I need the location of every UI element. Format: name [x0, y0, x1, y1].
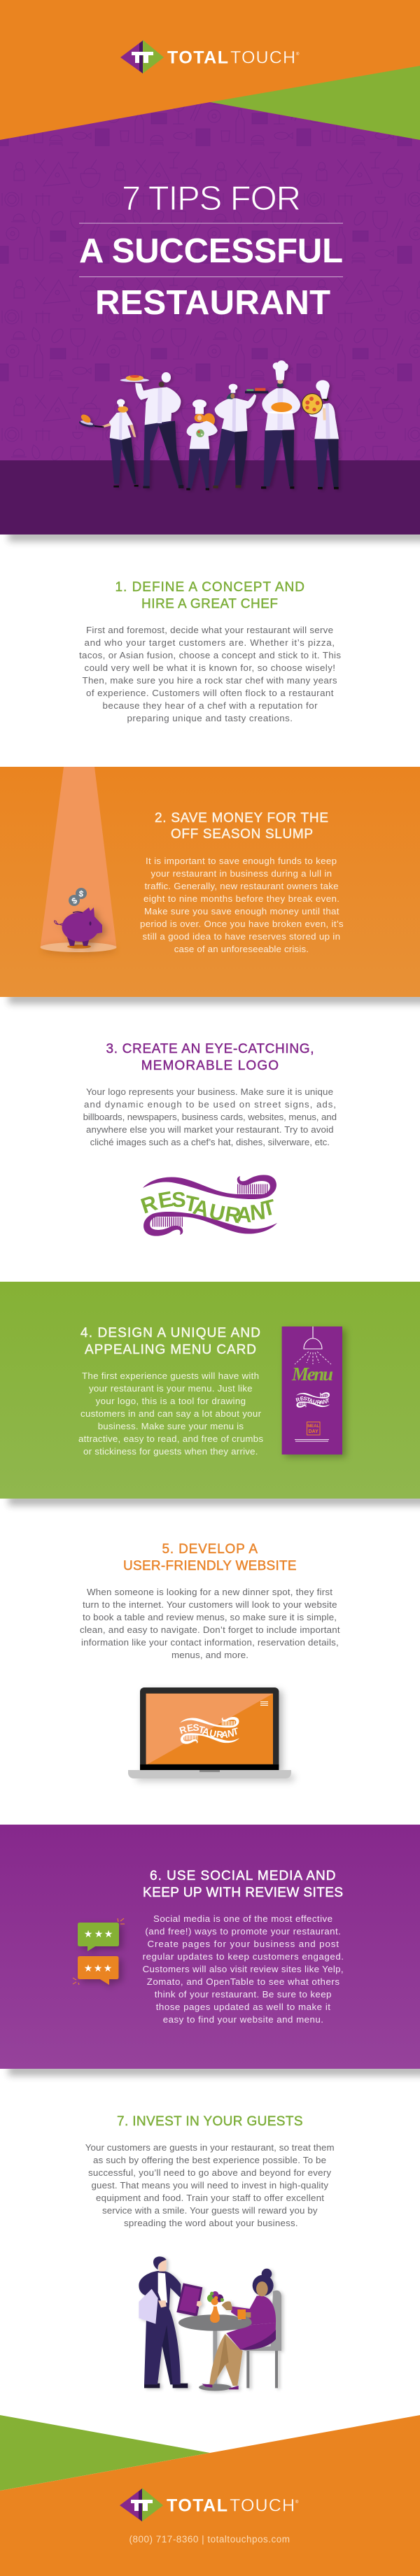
tip 4 body text: The first experience guests will have with [82, 1371, 259, 1381]
tip 6 body text: Zomato, and OpenTable to see what others [147, 1976, 340, 1987]
tip 5 body text: turn to the internet. Your customers will look to your website [83, 1599, 337, 1610]
tip 3 body text [83, 1087, 337, 1147]
tip 6 body text: those pages updated as well to make it [156, 2002, 330, 2012]
tip 1 body text: First and foremost, decide what your restaurant will serve [86, 625, 333, 635]
tip 6 body text: (and free!) ways to promote your restaurant. [145, 1926, 341, 1937]
tip 2 body text: It is important to save enough funds to keep [146, 856, 337, 866]
tip 5 heading [123, 1542, 297, 1573]
tip 1 heading: HIRE A GREAT CHEF [141, 597, 278, 611]
tip 2 body text: period is over. Once you have broken even, it’s [140, 919, 344, 929]
laptop screen logo [178, 1717, 240, 1744]
tip 3 body text: and dynamic enough to be used on street signs, ads, [84, 1099, 336, 1110]
menu card illustration: Menu [291, 1364, 333, 1385]
tip 7 body text [85, 2142, 335, 2228]
tip 5 body text: When someone is looking for a new dinner spot, they first [87, 1587, 332, 1597]
tip 2 heading: OFF SEASON SLUMP [171, 827, 313, 842]
tip 3 heading [106, 1042, 314, 1073]
panel: tip 2 [0, 767, 420, 997]
chef with pan [78, 399, 139, 488]
tip 6 body text: easy to find your website and menu. [163, 2014, 323, 2025]
tip 4 body text [78, 1371, 263, 1457]
tip 3 body text: Your logo represents your business. Make sure it is unique [86, 1087, 333, 1097]
header logo [120, 40, 300, 73]
tip 1 body text: tacos, or Asian fusion, choose a concept and stick to it. This [79, 650, 341, 660]
spotlight [41, 767, 116, 947]
panel: tip 4 [0, 1282, 420, 1499]
tip 6 heading: KEEP UP WITH REVIEW SITES [143, 1885, 343, 1900]
tip 4 body text: customers in and can say a lot about your [80, 1408, 262, 1419]
floor [0, 460, 420, 535]
chefs illustration, left group [78, 372, 218, 490]
tip 7 body text: service with a smile. Your guests will reward you by [102, 2205, 318, 2216]
tip 1 body text: of experience. Customers will often flock to a restaurant [86, 688, 334, 698]
tip 7 body text: as such by offering the best experience possible. To be [93, 2155, 326, 2165]
panel: tip 6 [0, 1825, 420, 2576]
tip 2 body text: eight to nine months before they break even. [144, 893, 340, 904]
tip 1 body text: and who your target customers are. Whether it’s pizza, [84, 637, 335, 648]
tip 7 body text: successful, you’ll need to go above and beyond for every [88, 2167, 331, 2178]
tip 1 body text: Then, make sure you hire a rock star chef with many years [83, 675, 337, 686]
chef with salad [186, 399, 218, 490]
tip 1 body text: preparing unique and tasty creations. [127, 713, 293, 723]
title [79, 180, 343, 322]
review bubbles icon: ★ [94, 1962, 102, 1974]
footer logo [120, 2488, 299, 2521]
mini restaurant logo: RESTAURANT [295, 1395, 330, 1406]
tip 6 body text: Social media is one of the most effective [153, 1913, 332, 1924]
tip 1 heading [115, 580, 304, 611]
tip 6 heading: 6. USE SOCIAL MEDIA AND [150, 1869, 336, 1883]
tip 4 heading: APPEALING MENU CARD [85, 1343, 256, 1357]
tip 7 body text: equipment and food. Train your staff to offer excellent [96, 2193, 324, 2203]
tip 5 heading: 5. DEVELOP A [162, 1542, 258, 1557]
tip 4 body text: business. Make sure your menu is [98, 1421, 244, 1431]
tip 5 body text [80, 1587, 340, 1660]
tip 1 body text: could very well be what it is known for, so choose wisely! [84, 663, 335, 673]
tip 6 body text: Create pages for your business and post [147, 1939, 339, 1949]
chefs illustration, right group [213, 360, 339, 489]
tip 4 body text: your logo, this is a tool for drawing [96, 1396, 246, 1406]
mini restaurant logo [295, 1392, 330, 1408]
header logo: TOUCH [230, 48, 295, 67]
tip 5 heading: USER-FRIENDLY WEBSITE [123, 1559, 297, 1573]
piggy bank illustration [41, 888, 117, 955]
restaurant logo: RESTAURANT [138, 1187, 278, 1228]
table [199, 2328, 232, 2391]
tip 6 heading [143, 1869, 343, 1900]
tip 3 body text: cliché images such as a chef’s hat, dishes, silverware, etc. [90, 1137, 330, 1147]
review bubbles icon: ★ [104, 1962, 112, 1974]
tip 5 body text: menus, and more. [172, 1650, 248, 1660]
hero panel [0, 102, 420, 535]
contact line: (800) 717-8360 | totaltouchpos.com [129, 2534, 290, 2545]
tip 2 shadow [8, 993, 420, 1004]
chef with pasta plate [120, 372, 183, 488]
restaurant logo [138, 1175, 278, 1236]
menu card illustration: DAY [309, 1429, 318, 1434]
tip 6 body text: regular updates to keep customers engaged. [143, 1951, 344, 1962]
tip 6 shadow [8, 2065, 420, 2076]
tip 7 heading: 7. INVEST IN YOUR GUESTS [117, 2114, 302, 2129]
tip 7 body text: Your customers are guests in your restaurant, so treat them [85, 2142, 335, 2153]
review bubbles icon: ★ [84, 1962, 92, 1974]
hero shadow [8, 530, 420, 542]
table top and vase [178, 2291, 252, 2331]
footer logo: ® [295, 2500, 299, 2505]
review bubbles icon [73, 1918, 125, 1985]
waiter [139, 2256, 202, 2388]
tip 2 body text [140, 856, 344, 954]
footer logo: TOUCH [230, 2496, 295, 2516]
title: RESTAURANT [95, 284, 330, 322]
tip 2 body text: your restaurant in business during a lull in [151, 868, 332, 879]
tip 2 heading [155, 811, 328, 842]
tip 5 body text: information like your contact information, reservation details, [81, 1637, 339, 1648]
tip 3 body text: anywhere else you will market your restaurant. Try to avoid [86, 1124, 333, 1135]
tip 4 shadow [8, 1494, 420, 1506]
piggy bank illustration: $ [70, 896, 79, 906]
tip 5 body text: clean, and easy to navigate. Don’t forget to include important [80, 1625, 340, 1635]
guest [202, 2269, 276, 2389]
tip 6 body text: think of your restaurant. Be sure to keep [155, 1989, 331, 2000]
tip 4 heading: 4. DESIGN A UNIQUE AND [80, 1326, 260, 1340]
green corner wedge [210, 66, 420, 140]
tip 2 body text: Make sure you save enough money until that [144, 906, 340, 917]
tip 7 body text: guest. That means you will need to invest in high-quality [91, 2180, 328, 2191]
tip 6 body text: Customers will also visit review sites like Yelp, [143, 1964, 344, 1974]
tip 1 heading: 1. DEFINE A CONCEPT AND [115, 580, 304, 595]
review bubbles icon: ★ [94, 1928, 103, 1939]
tip 3 heading: MEMORABLE LOGO [141, 1059, 279, 1073]
tip 4 heading [80, 1326, 260, 1357]
title: A SUCCESSFUL [79, 232, 343, 270]
footer logo: TOTAL [167, 2496, 227, 2516]
footer band [0, 2415, 420, 2576]
laptop screen logo: RESTAURANT [178, 1722, 240, 1741]
tip 1 body text [79, 625, 341, 723]
tip 3 heading: 3. CREATE AN EYE-CATCHING, [106, 1042, 314, 1056]
tip 6 body text [143, 1913, 344, 2025]
chef with turkey [261, 360, 300, 489]
guest chair [243, 2291, 281, 2388]
tip 3 body text: billboards, newspapers, business cards, websites, menus, and [83, 1112, 337, 1122]
chef with tray [213, 384, 268, 488]
tip 2 heading: 2. SAVE MONEY FOR THE [155, 811, 328, 826]
tip 7 body text: spreading the word about your business. [124, 2218, 298, 2228]
tip 2 body text: still a good idea to have reserves stored up in [143, 931, 340, 942]
tip 4 body text: your restaurant is your menu. Just like [89, 1383, 252, 1394]
tip 5 body text: to book a table and review menus, so make sure it is simple, [83, 1612, 337, 1622]
waiter and guest illustration [139, 2256, 281, 2391]
chef with pizza [302, 380, 339, 489]
tip 4 body text: or stickiness for guests when they arrive. [83, 1446, 258, 1457]
header band [0, 0, 420, 147]
tip 2 body text: case of an unforeseeable crisis. [174, 944, 309, 954]
header logo: TOTAL [167, 48, 228, 67]
tip 1 body text: because they hear of a chef with a reputation for [102, 700, 318, 711]
review bubbles icon: ★ [84, 1928, 92, 1939]
tip 2 body text: traffic. Generally, new restaurant owners take [144, 881, 339, 891]
lamp [295, 1326, 331, 1364]
piggy bank illustration: $ [78, 889, 85, 899]
title: 7 TIPS FOR [122, 180, 301, 218]
tip 4 body text: attractive, easy to read, and free of crumbs [78, 1434, 263, 1444]
review bubbles icon: ★ [104, 1928, 113, 1939]
header logo: ® [296, 52, 300, 57]
menu card illustration [282, 1326, 342, 1455]
menu card illustration: MEAL [307, 1424, 320, 1429]
laptop illustration [128, 1687, 294, 1781]
